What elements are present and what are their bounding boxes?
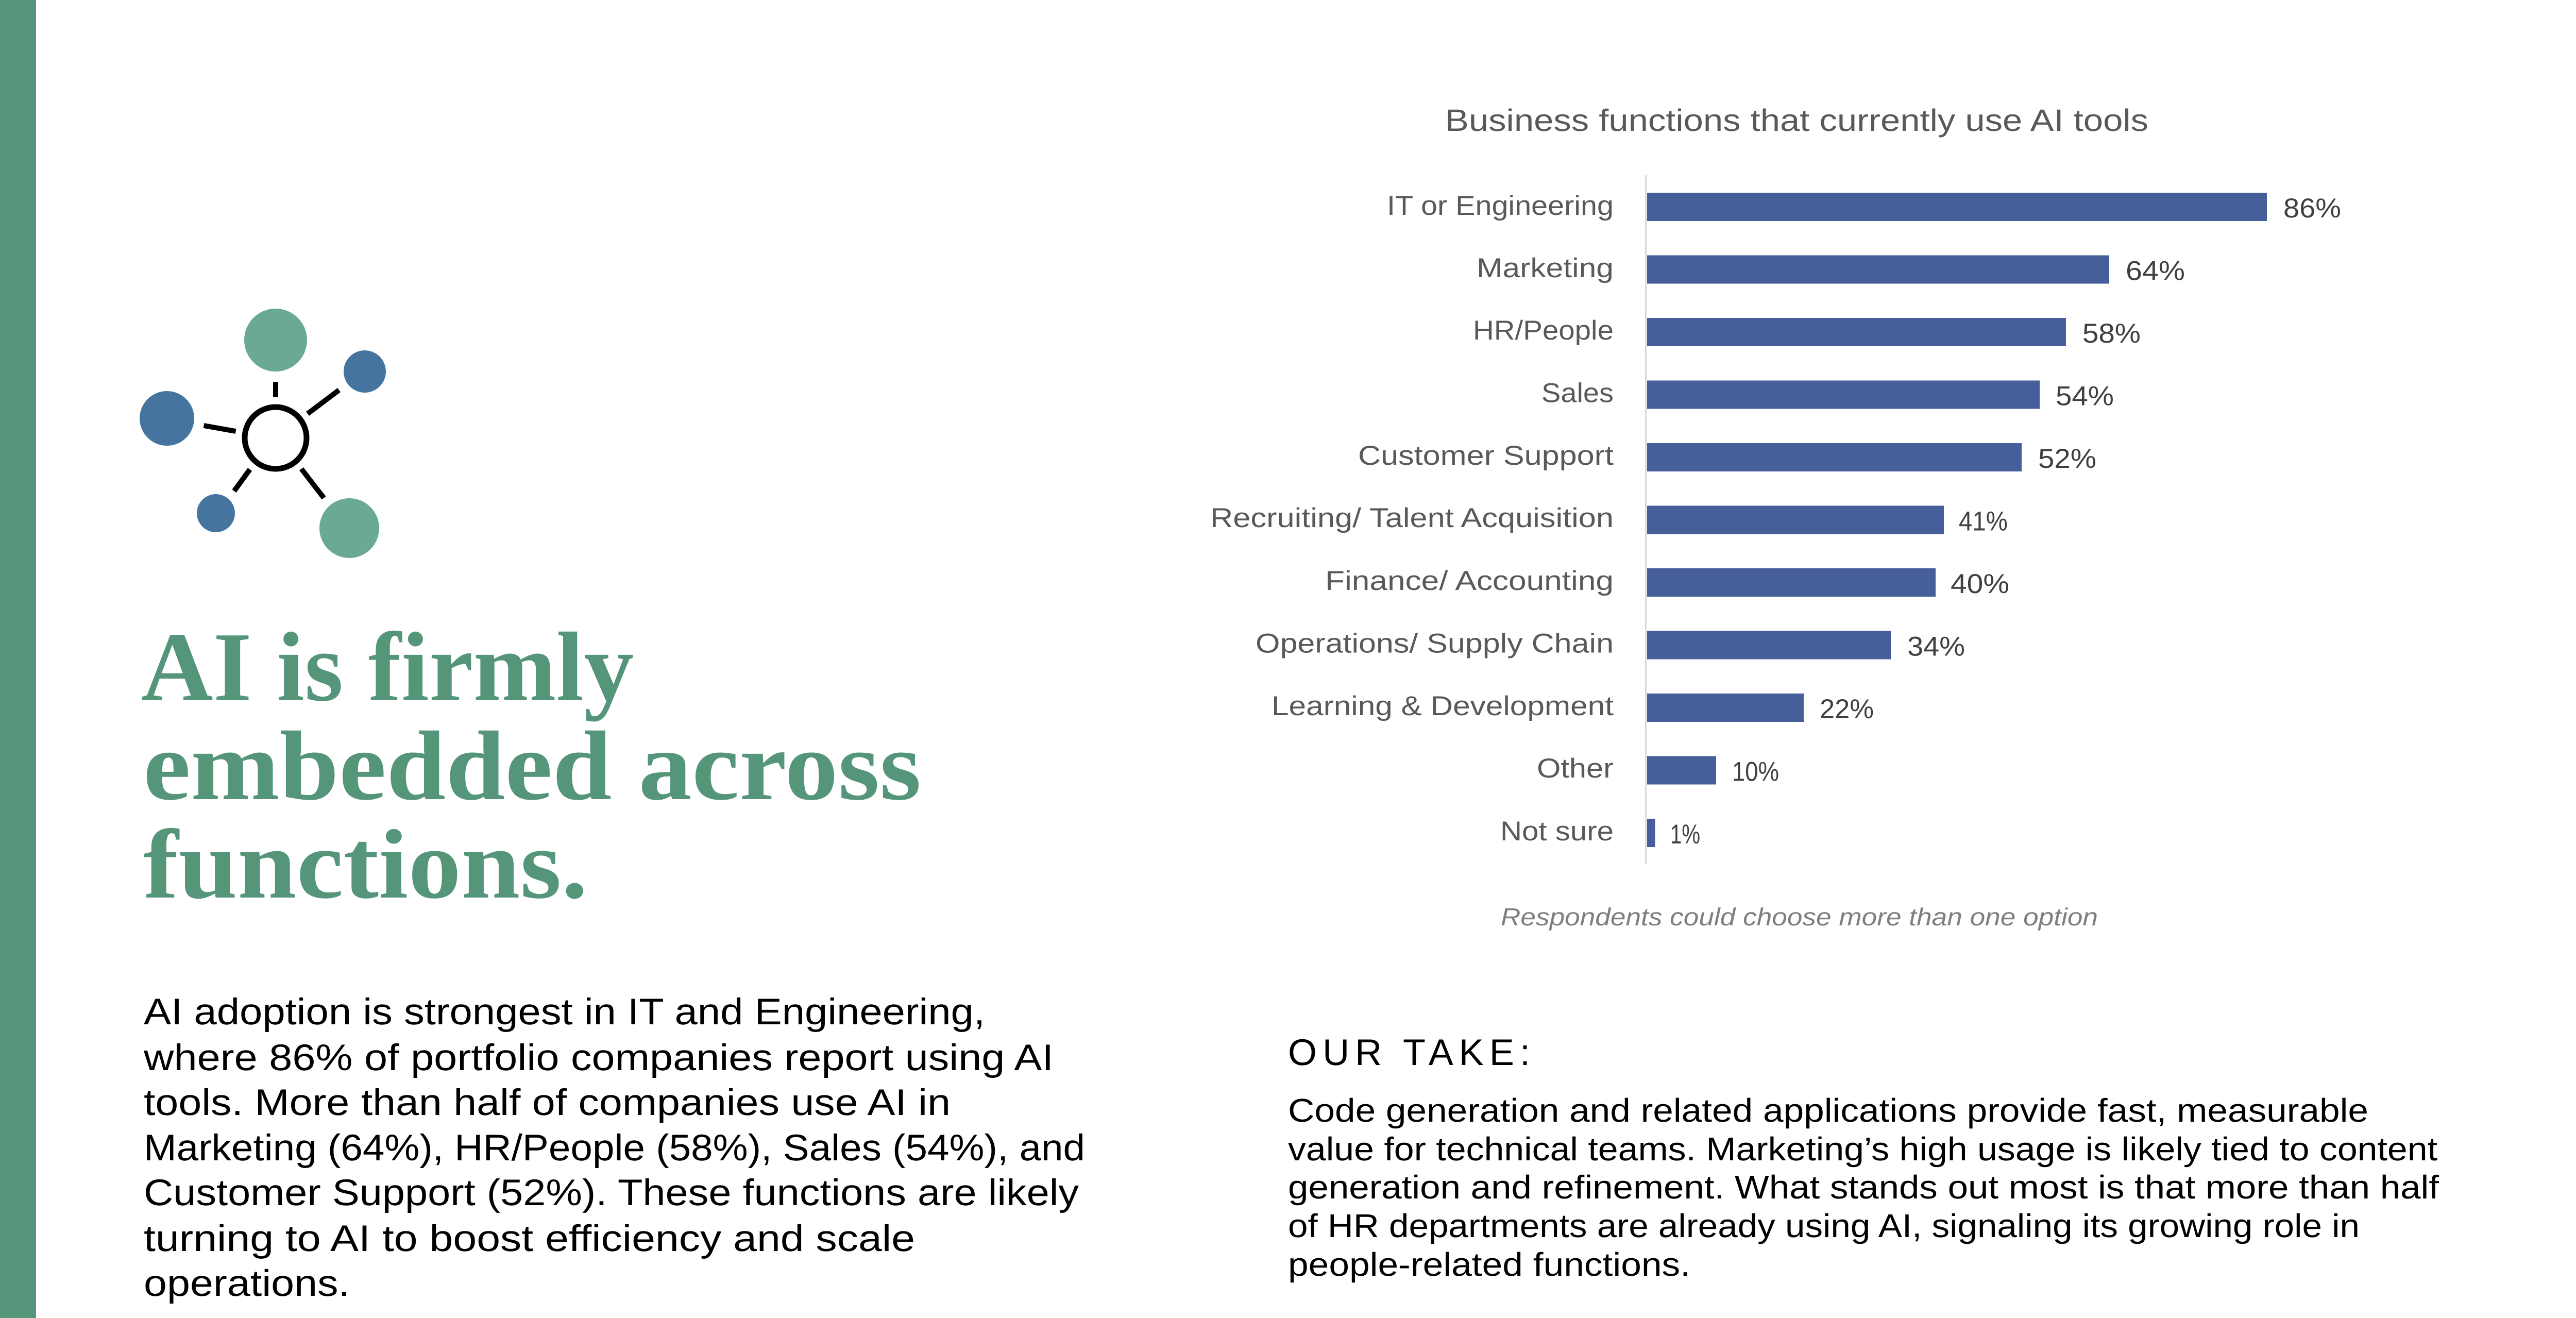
- our take paragraph: of HR departments are already using AI, signaling its growing role in: [1288, 1207, 2360, 1244]
- row: Learning & Development 22%: Learning & Development: [1272, 691, 1614, 721]
- our take heading: OUR TAKE:: [1288, 1032, 1530, 1073]
- row: Operations/ Supply Chain 34%: [1256, 629, 1965, 662]
- row: Marketing 64%: 64%: [2126, 256, 2185, 286]
- row: Other 10%: [1537, 753, 1779, 787]
- row: Not sure 1%: [1500, 816, 1700, 850]
- body paragraph: AI adoption summary: Customer Support (52%). These functions are likely: [144, 1172, 1079, 1213]
- body paragraph: AI adoption summary: AI adoption is strongest in IT and Engineering,: [144, 991, 985, 1033]
- row: Recruiting/ Talent Acquisition 41%: Recruiting/ Talent Acquisition: [1210, 503, 1614, 533]
- row: Finance/ Accounting 40%: [1325, 566, 2009, 599]
- main heading: AI is firmly: [141, 612, 634, 722]
- row: Recruiting/ Talent Acquisition 41%: [1210, 503, 2008, 537]
- row: Finance/ Accounting 40%: Finance/ Accounting: [1325, 566, 1614, 596]
- row: Sales 54%: 54%: [2056, 381, 2114, 411]
- row: HR/People 58%: HR/People: [1473, 315, 1614, 346]
- row: Marketing 64%: Marketing: [1477, 253, 1614, 283]
- our take paragraph: Code generation and related applications provide fast, measurable: [1288, 1092, 2368, 1129]
- row: Marketing 64%: [1477, 253, 2185, 286]
- icon: network hub: [140, 309, 386, 558]
- row: Finance/ Accounting 40%: 40%: [1951, 569, 2009, 599]
- row: Sales 54%: Sales: [1541, 378, 1614, 408]
- row: Learning & Development 22%: [1272, 691, 1874, 724]
- row: Recruiting/ Talent Acquisition 41%: 41%: [1959, 506, 2008, 537]
- main heading: functions.: [143, 809, 588, 919]
- chart footnote: Respondents could choose more than one option: [1501, 904, 2098, 931]
- row: Operations/ Supply Chain 34%: 34%: [1907, 632, 1965, 662]
- row: IT or Engineering 86%: 86%: [2283, 193, 2341, 224]
- row: Other 10%: 10%: [1732, 756, 1779, 787]
- row: Not sure 1%: Not sure: [1500, 816, 1614, 847]
- row: Customer Support 52%: 52%: [2038, 444, 2096, 474]
- our take paragraph: value for technical teams. Marketing’s high usage is likely tied to content: [1288, 1130, 2437, 1168]
- row: HR/People 58%: [1473, 315, 2141, 349]
- main heading: embedded across: [143, 711, 921, 821]
- left accent bar: [0, 0, 36, 1318]
- body paragraph: AI adoption summary: Marketing (64%), HR/People (58%), Sales (54%), and: [144, 1127, 1085, 1169]
- main heading: [141, 612, 921, 919]
- body paragraph: AI adoption summary: operations.: [144, 1263, 350, 1304]
- body paragraph: AI adoption summary: where 86% of portfolio companies report using AI: [143, 1037, 1054, 1078]
- bar chart: business functions using AI tools: [1210, 175, 2341, 864]
- row: Customer Support 52%: Customer Support: [1358, 441, 1614, 471]
- row: Operations/ Supply Chain 34%: Operations/ Supply Chain: [1256, 629, 1614, 658]
- chart title: Business functions that currently use AI tools: [1445, 103, 2148, 138]
- body paragraph: AI adoption summary: turning to AI to boost efficiency and scale: [144, 1218, 915, 1259]
- row: HR/People 58%: 58%: [2082, 318, 2141, 349]
- our take paragraph: [1288, 1092, 2439, 1283]
- body paragraph: AI adoption summary: tools. More than half of companies use AI in: [144, 1082, 951, 1123]
- our take paragraph: generation and refinement. What stands out most is that more than half: [1288, 1169, 2439, 1206]
- row: Sales 54%: [1541, 378, 2114, 411]
- body paragraph: AI adoption summary: [143, 991, 1085, 1304]
- row: Not sure 1%: 1%: [1670, 819, 1700, 850]
- row: Customer Support 52%: [1358, 441, 2096, 474]
- row: Learning & Development 22%: 22%: [1820, 694, 1874, 724]
- row: Other 10%: Other: [1537, 753, 1614, 784]
- our take paragraph: people-related functions.: [1288, 1246, 1690, 1283]
- row: IT or Engineering 86%: [1387, 191, 2341, 224]
- row: IT or Engineering 86%: IT or Engineering: [1387, 191, 1614, 221]
